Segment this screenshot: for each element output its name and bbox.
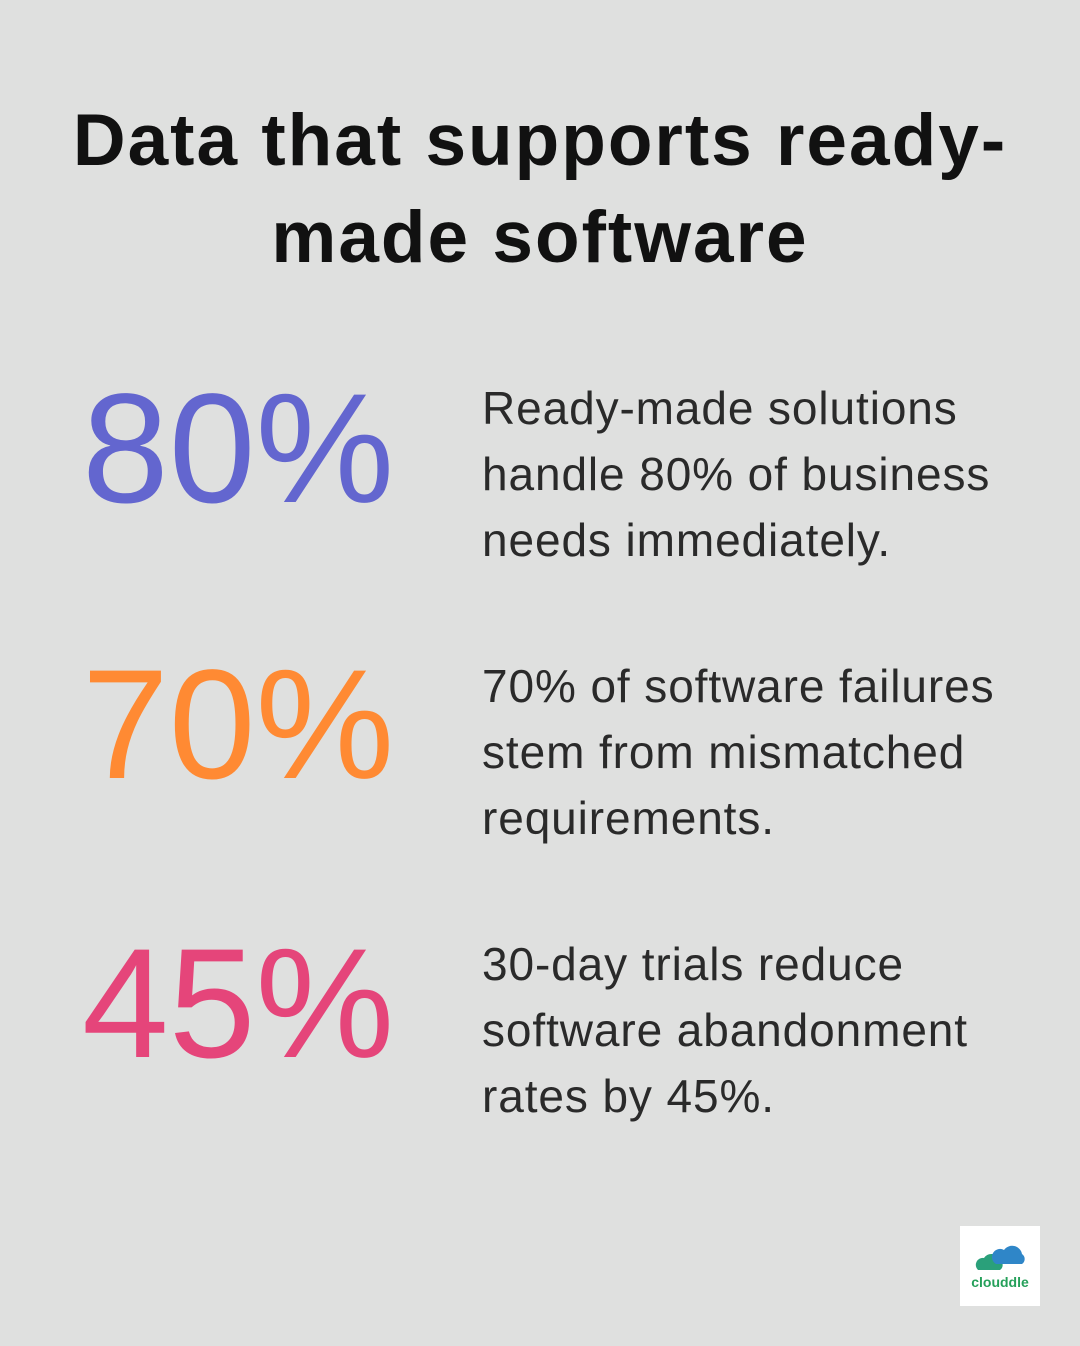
stat 3 text: rates by 45%. xyxy=(482,1070,775,1122)
title: Data that supports ready- xyxy=(73,100,1007,181)
stat 1 text: Ready-made solutions xyxy=(482,382,958,434)
stat 1 number: 80% xyxy=(82,362,394,536)
logo xyxy=(960,1226,1040,1306)
stat 3 text: software abandonment xyxy=(482,1004,968,1056)
logo: clouddle xyxy=(971,1274,1029,1290)
stat 2 text: 70% of software failures xyxy=(482,660,995,712)
stat 2 text: stem from mismatched xyxy=(482,726,965,778)
stat 1 text: handle 80% of business xyxy=(482,448,990,500)
stat 2 text xyxy=(482,660,995,844)
stat 1 text: needs immediately. xyxy=(482,514,891,566)
stat 3 text: 30-day trials reduce xyxy=(482,938,904,990)
title xyxy=(73,100,1007,278)
stat 1 text xyxy=(482,382,990,566)
stat 3 number: 45% xyxy=(82,917,394,1091)
stat 3 text xyxy=(482,938,968,1122)
stat 2 number: 70% xyxy=(82,638,394,812)
title: made software xyxy=(271,197,809,278)
stat 2 text: requirements. xyxy=(482,792,775,844)
